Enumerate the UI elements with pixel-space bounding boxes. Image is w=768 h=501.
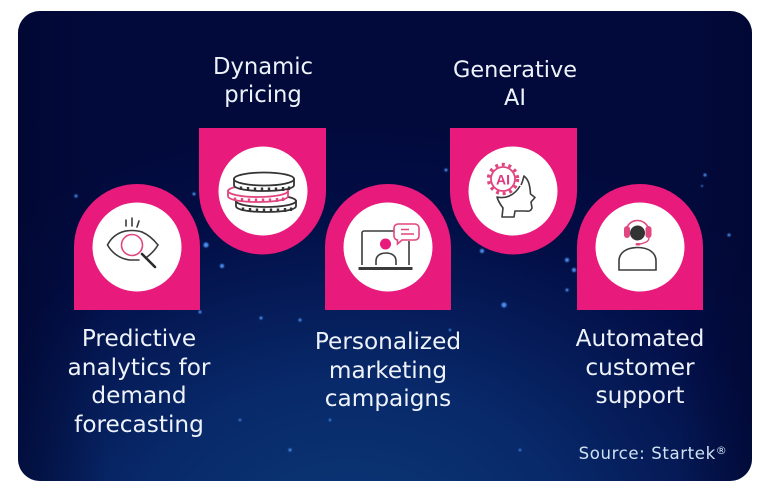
source note: Source: Startek: [579, 444, 716, 463]
label: predictive analytics: demand: [91, 382, 187, 409]
card: automated support: [577, 184, 703, 310]
card: generative AI: [450, 128, 577, 254]
label: predictive analytics: analytics for: [68, 354, 211, 381]
icon: headset agent: [619, 221, 656, 270]
label: personalized marketing: campaigns: [325, 385, 451, 412]
label: automated support: support: [595, 382, 685, 409]
label: generative AI: Generative: [453, 57, 577, 83]
icon: coin stack: [228, 172, 296, 212]
source note: ®: [716, 444, 727, 457]
card: predictive analytics: [74, 184, 200, 310]
label: automated support: Automated: [576, 325, 704, 352]
label: dynamic pricing: Dynamic: [213, 54, 313, 80]
icon: eye with magnifier: [108, 218, 158, 267]
label: personalized marketing: marketing: [329, 357, 447, 384]
label: predictive analytics: Predictive: [82, 325, 196, 352]
label: automated support: customer: [585, 354, 695, 381]
label: personalized marketing: Personalized: [315, 328, 461, 355]
card: personalized marketing: [325, 184, 451, 310]
card: dynamic pricing: [199, 128, 326, 254]
icon: AI gear and head: AI: [496, 172, 510, 188]
label: dynamic pricing: pricing: [224, 82, 302, 108]
label: generative AI: AI: [504, 85, 526, 111]
label: predictive analytics: forecasting: [74, 411, 204, 438]
icon: laptop with chat bubble: [358, 224, 419, 268]
